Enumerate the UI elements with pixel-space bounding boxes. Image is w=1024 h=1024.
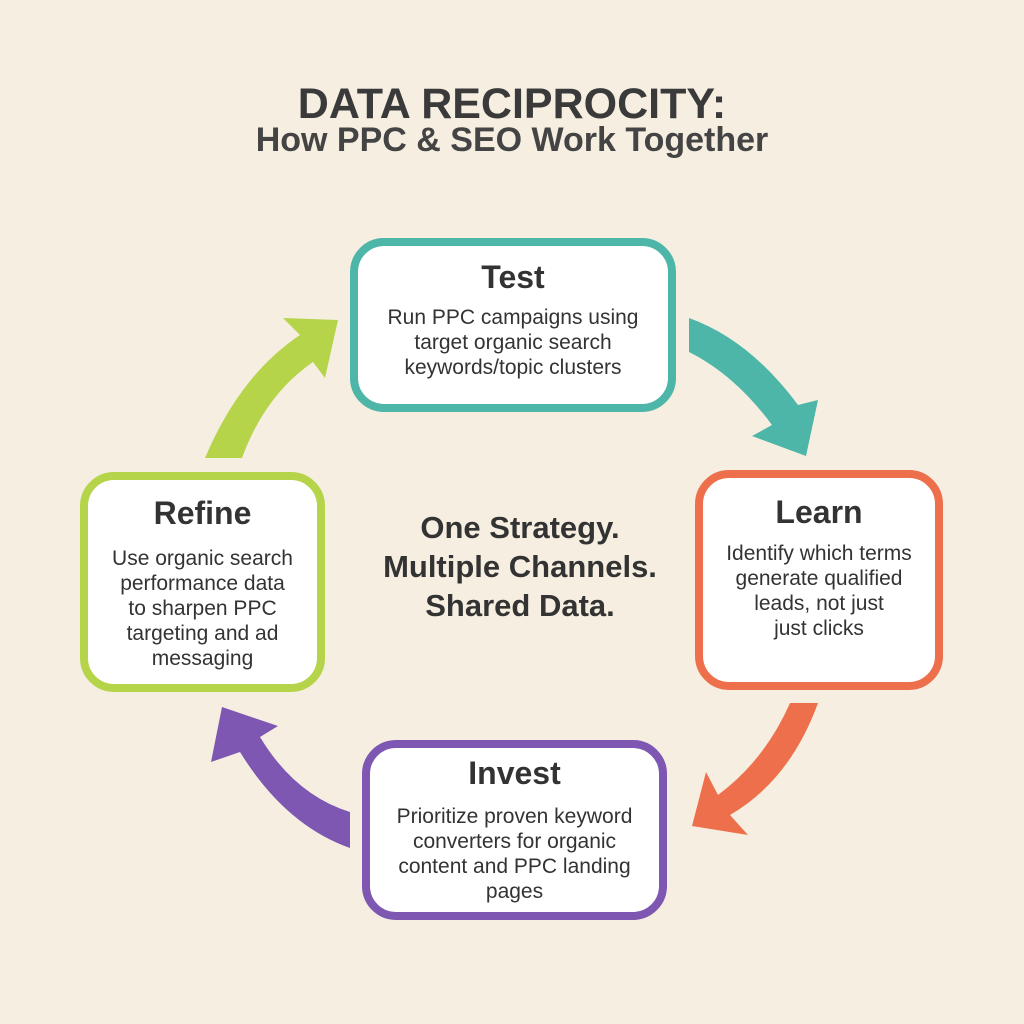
title: DATA RECIPROCITY: <box>298 80 726 128</box>
panel: refine: Use organic search <box>112 547 293 570</box>
center tagline <box>383 510 657 623</box>
panel: test <box>350 238 676 412</box>
panel: refine: targeting and ad <box>127 622 278 645</box>
panel: learn: Learn <box>775 494 863 530</box>
panel: learn: leads, not just <box>754 592 884 615</box>
panel: refine <box>80 472 325 692</box>
panel: invest <box>362 740 667 920</box>
panel: test: Test <box>481 259 545 295</box>
arrow: test to learn <box>689 318 818 456</box>
panel: refine: performance data <box>120 572 285 595</box>
panel: invest: converters for organic <box>413 830 616 853</box>
panel: learn <box>695 470 943 690</box>
panel: refine: messaging <box>152 647 253 670</box>
arrow: learn to invest <box>692 703 818 835</box>
panel: test: Run PPC campaigns using <box>388 306 638 329</box>
center tagline: One Strategy. <box>420 510 620 545</box>
panel: invest: content and PPC landing <box>398 855 631 878</box>
arrow: refine to test <box>205 318 338 458</box>
panel: test: keywords/topic clusters <box>404 356 622 379</box>
panel: learn: generate qualified <box>736 567 902 590</box>
panel: learn: just clicks <box>774 617 864 640</box>
arrow: invest to refine <box>211 707 350 848</box>
panel: invest: Prioritize proven keyword <box>397 805 632 828</box>
panel: test: target organic search <box>414 331 612 354</box>
center tagline: Shared Data. <box>425 588 615 623</box>
panel: refine: to sharpen PPC <box>128 597 277 620</box>
panel: invest: Invest <box>468 755 561 791</box>
center tagline: Multiple Channels. <box>383 549 657 584</box>
panel: invest: pages <box>486 880 543 903</box>
panel: learn: Identify which terms <box>726 542 912 565</box>
panel: refine: Refine <box>154 495 251 531</box>
subtitle: How PPC & SEO Work Together <box>256 121 768 159</box>
